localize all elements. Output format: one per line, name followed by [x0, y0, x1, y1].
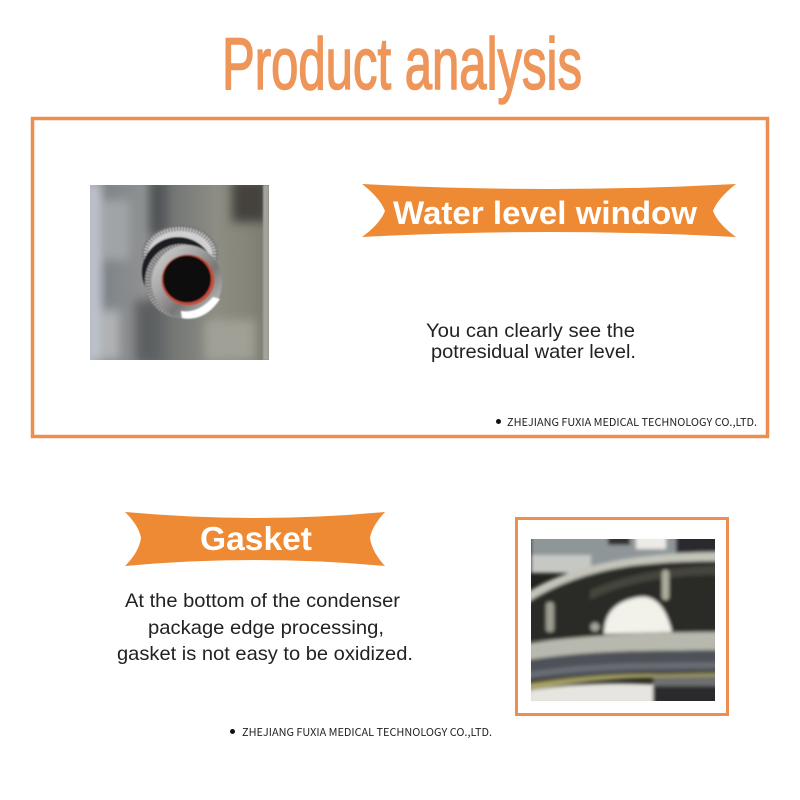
company credit: top panel: ZHEJIANG FUXIA MEDICAL TECHNOLOGY CO.,LTD. — [507, 414, 757, 430]
panel: water level window — [32, 118, 768, 436]
text: gasket description: At the bottom of the condenser — [125, 590, 401, 612]
knurled back ring — [143, 226, 217, 260]
black groove — [141, 236, 208, 286]
panel: gasket — [117, 512, 728, 740]
text: gasket description — [117, 590, 413, 665]
photo: water level window fitting — [90, 180, 269, 365]
front knurled ring — [144, 242, 188, 318]
company credit: bottom panel: ZHEJIANG FUXIA MEDICAL TECHNOLOGY CO.,LTD. — [242, 724, 492, 740]
banner: water level window: Water level window — [393, 195, 698, 231]
banner: gasket — [125, 512, 385, 566]
dark interior — [528, 561, 718, 640]
banner: gasket: Gasket — [200, 520, 312, 557]
polished bezel — [152, 245, 222, 319]
gasket band — [528, 650, 718, 681]
bottom reflection — [528, 683, 653, 704]
text: water level description: potresidual water level. — [431, 341, 636, 363]
title: Product analysis — [222, 24, 582, 105]
text: gasket description: gasket is not easy to be oxidized. — [117, 643, 413, 665]
yellow edge — [528, 673, 718, 691]
text: water level description — [426, 320, 636, 363]
bright reflection — [181, 297, 220, 319]
photo: gasket — [528, 535, 720, 704]
upper rim — [528, 552, 718, 602]
red seal — [162, 254, 214, 306]
photo frame: gasket — [516, 518, 728, 714]
dark lens — [163, 256, 211, 302]
panel frame — [32, 118, 768, 436]
text: gasket description: package edge processing, — [148, 617, 384, 639]
banner: water level window — [362, 184, 736, 237]
metal rim — [528, 632, 718, 660]
bolts — [662, 570, 669, 600]
text: water level description: You can clearly see the — [426, 320, 635, 342]
white ball — [604, 597, 672, 634]
